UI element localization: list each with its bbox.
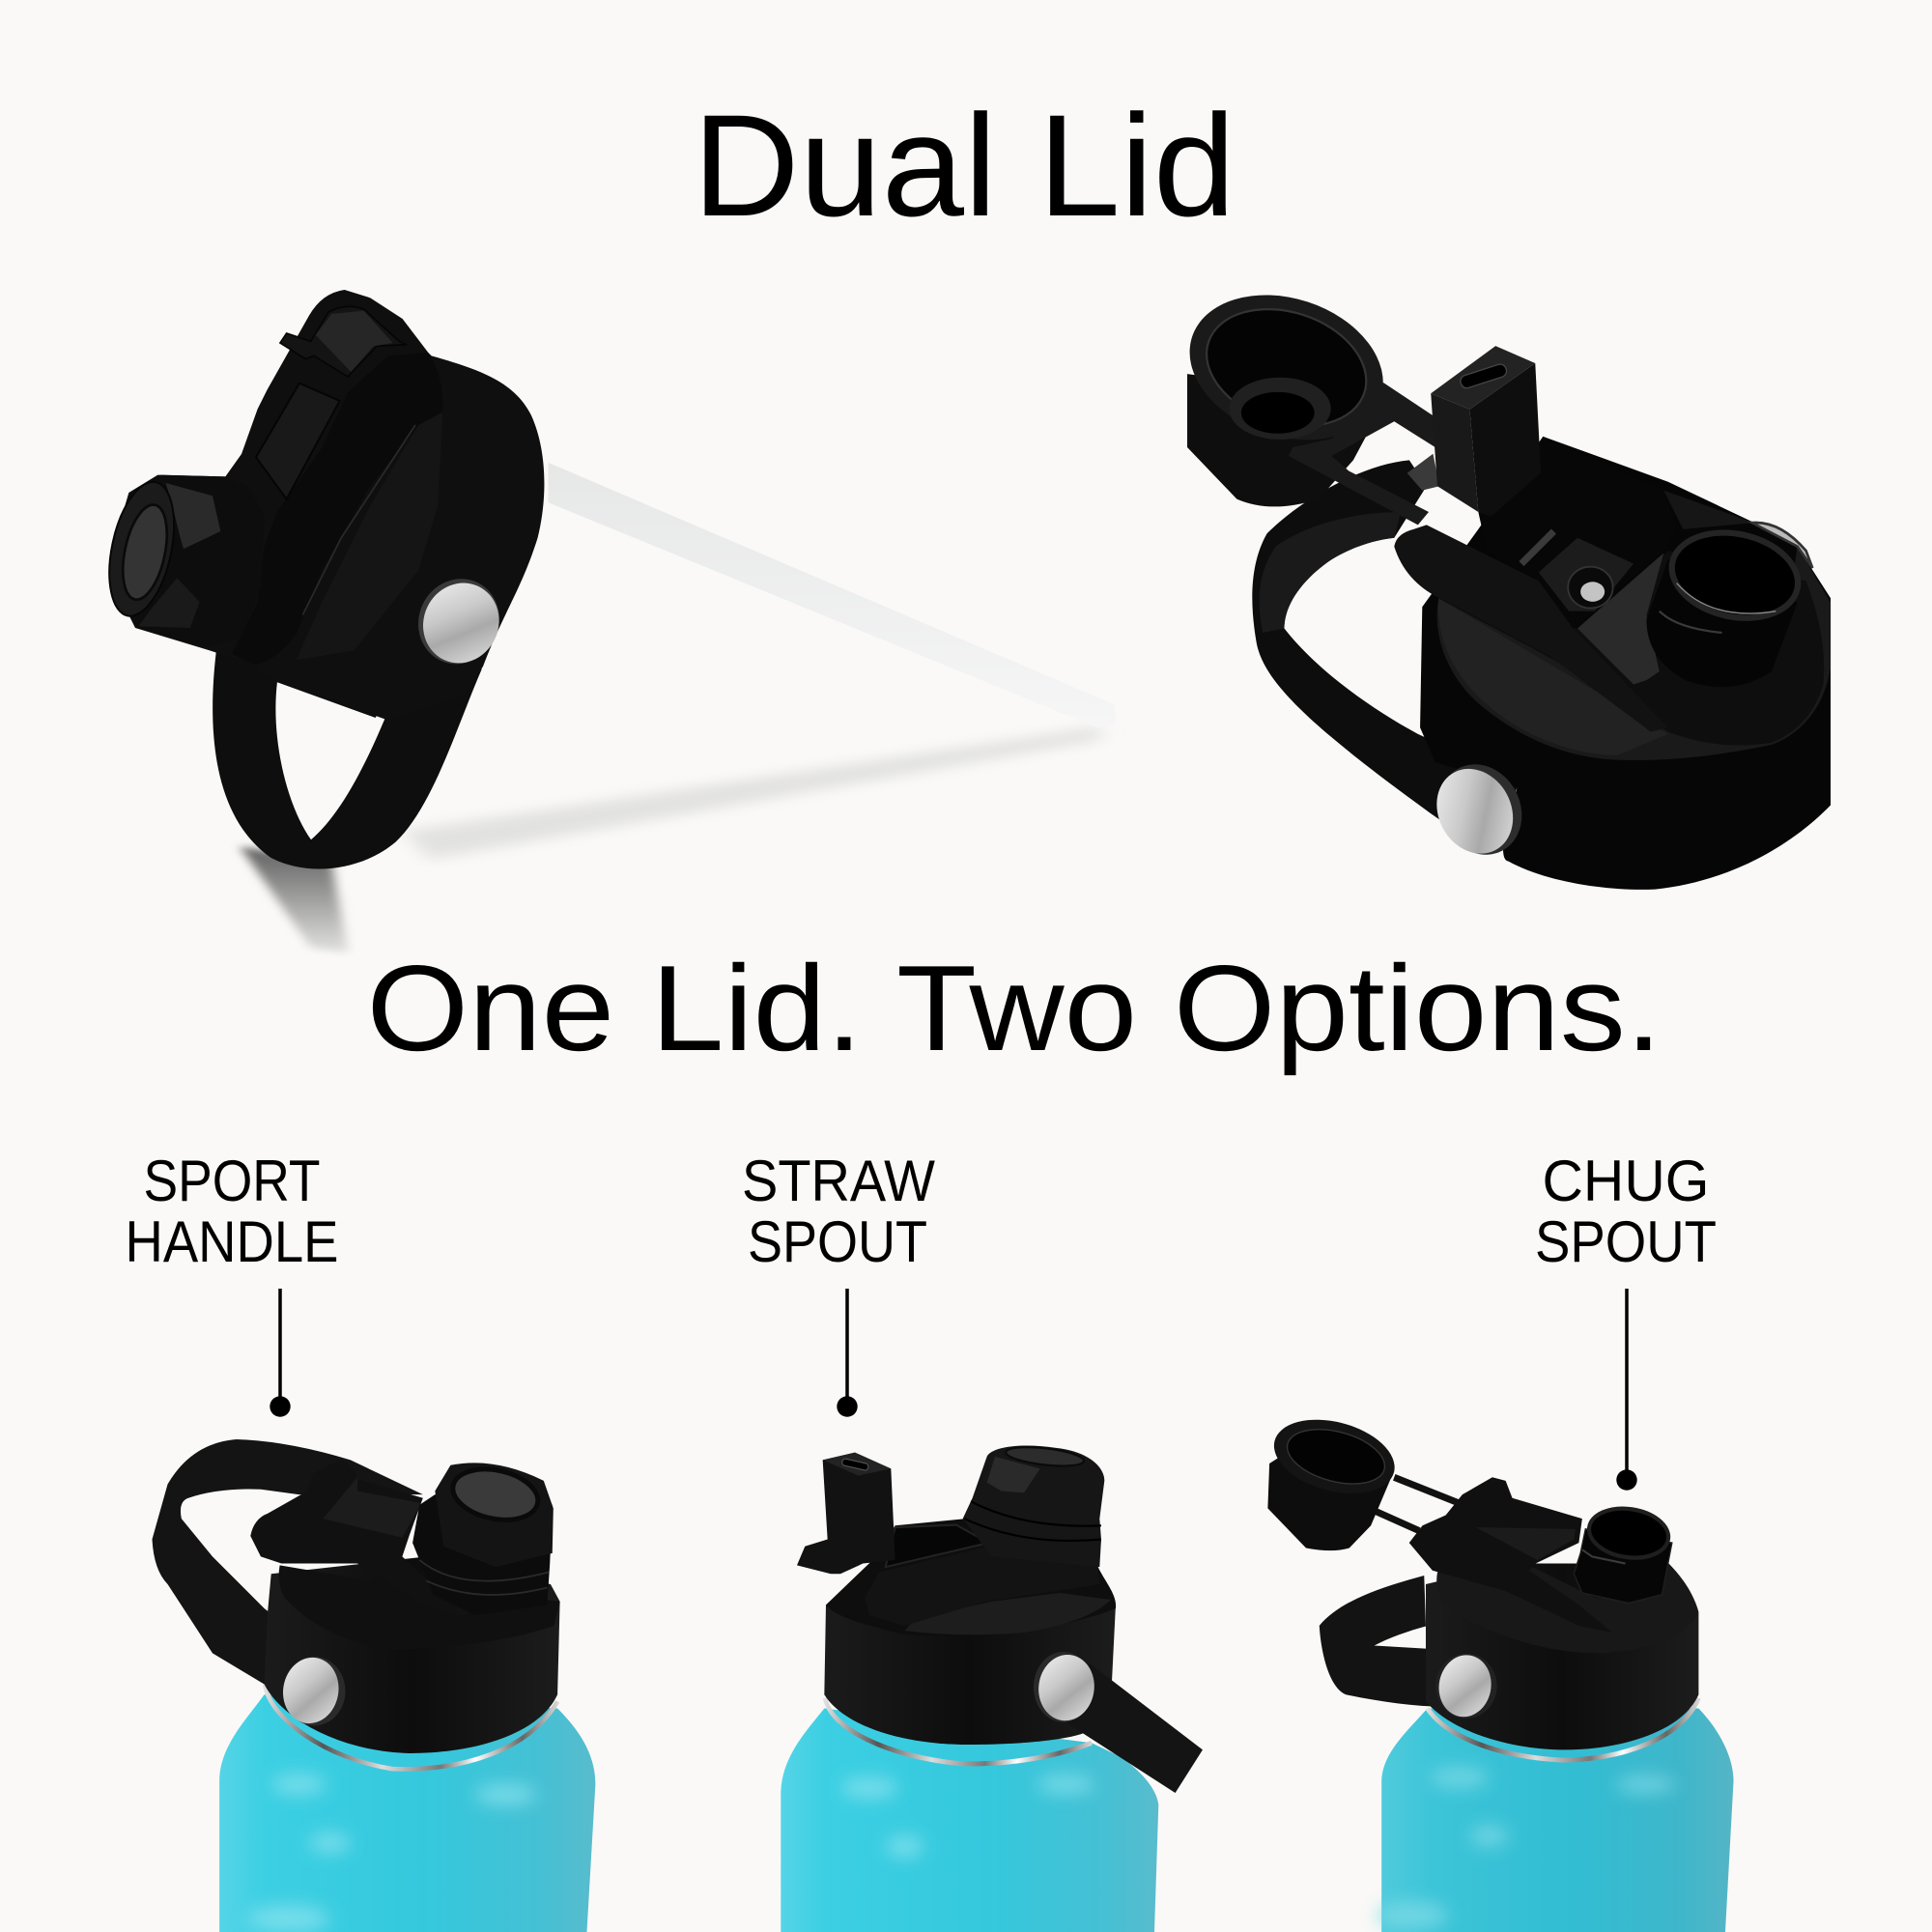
strap: [1320, 1576, 1499, 1707]
cap ring: [1171, 271, 1402, 464]
strap: [152, 1439, 423, 1694]
rivet rim: [1424, 750, 1537, 869]
spout cap: [963, 1445, 1104, 1567]
bottle: straw spout: [781, 1444, 1203, 1932]
rivet: [1422, 755, 1527, 867]
flap: [323, 1477, 421, 1538]
spout rim: [1586, 1503, 1671, 1563]
cap body: [824, 1584, 1116, 1745]
straw slot: [1459, 362, 1508, 389]
spout line 2: SPOUT: [748, 1209, 927, 1274]
pointer: chug spout: [1616, 1289, 1637, 1491]
teal body: [219, 1694, 595, 1932]
straw: [549, 463, 1116, 726]
cap top face: [1005, 1444, 1085, 1469]
left plate: [1438, 598, 1668, 755]
rivet rim: [405, 565, 513, 677]
cap top: [826, 1519, 1116, 1635]
spout platform: [1439, 551, 1824, 746]
spout body: [1574, 1529, 1672, 1604]
spout rim glint: [1677, 583, 1776, 613]
upper band: [1437, 547, 1831, 760]
steel ring: [265, 1685, 557, 1769]
rivet rim: [283, 1657, 345, 1725]
spout bands: [419, 1560, 549, 1595]
tether: [1289, 383, 1435, 525]
plate swell: [297, 412, 442, 660]
pull tab roller: [316, 311, 393, 372]
spout face: [115, 500, 175, 604]
rivet: [1033, 1649, 1100, 1726]
teal body: [781, 1709, 1158, 1932]
lid photo: open caps: [1171, 271, 1831, 890]
lid body: [1420, 437, 1831, 890]
textured wedge: [1577, 553, 1663, 685]
straw shadow: [403, 726, 1100, 860]
handle line 2: HANDLE: [126, 1209, 338, 1274]
straw tube right side: [1469, 363, 1541, 516]
pellet hole: [1568, 567, 1613, 609]
arm plate: [1394, 525, 1668, 732]
straw tube front: [1431, 393, 1478, 512]
recess bar: [1521, 531, 1553, 564]
cap body: [1187, 374, 1385, 506]
tether arms: [1346, 1477, 1459, 1531]
recess: [1478, 437, 1677, 629]
cap body: [265, 1556, 560, 1753]
straw slot: [841, 1459, 868, 1471]
knob: [435, 1463, 554, 1567]
label: chug spout: [1535, 1149, 1717, 1274]
knob grip bottom: [138, 578, 200, 628]
knob grip top: [166, 483, 220, 549]
cap notch: [987, 1457, 1040, 1492]
strap gap: [1375, 1627, 1428, 1649]
shoulder highlights: [840, 1776, 1094, 1857]
spout body: [1646, 559, 1798, 687]
strap shadow: [240, 846, 349, 952]
spout base: [412, 1494, 553, 1615]
straw top: [823, 1453, 891, 1475]
arm plate: [865, 1547, 1099, 1626]
lid body: [113, 290, 544, 720]
rivet: [411, 571, 512, 675]
cap body: [1267, 1426, 1394, 1550]
strap: [1065, 1663, 1203, 1793]
steel ring: [825, 1698, 1092, 1764]
cap top plate: [279, 1565, 560, 1650]
bottle: sport handle: [152, 1439, 595, 1932]
pellet: [1580, 582, 1605, 602]
cap inside: [1282, 1420, 1390, 1493]
recess floor: [1539, 538, 1634, 611]
rivet: [1434, 1650, 1496, 1722]
sport line 1: SPORT: [143, 1149, 321, 1213]
cap inner hole: [1241, 392, 1315, 434]
straw tube top: [1431, 346, 1535, 410]
lid photo: side view with straw: [99, 290, 1116, 952]
straw, strap and shadows: [213, 463, 1116, 952]
straw tube: [797, 1453, 895, 1574]
cap body: [1426, 1564, 1698, 1749]
strap: [1252, 460, 1518, 853]
flap: [1476, 1527, 1576, 1560]
cap ring: [1266, 1407, 1402, 1505]
teal body: [1381, 1709, 1734, 1932]
title: Dual Lid: [693, 84, 1236, 246]
pointer: straw spout: [837, 1289, 858, 1417]
spout line 2: SPOUT: [1535, 1209, 1717, 1274]
lid head: [99, 290, 544, 720]
spout rim: [1663, 522, 1805, 629]
strap: [213, 642, 482, 869]
bottle: chug spout: [1266, 1407, 1734, 1932]
rivet rim: [1034, 1652, 1093, 1722]
cap inside: [1191, 290, 1381, 445]
side rivet: [1752, 523, 1812, 568]
pull tab: [280, 306, 406, 377]
arm plate: [250, 1460, 461, 1619]
rivet rim: [1435, 1654, 1497, 1719]
rivet: [278, 1653, 344, 1728]
spout collar: [1582, 1549, 1626, 1564]
steel ring: [1428, 1698, 1698, 1760]
lid top plate: [232, 353, 442, 665]
label: sport handle: [126, 1149, 338, 1274]
chug line 1: CHUG: [1542, 1149, 1710, 1213]
spout bands: [964, 1501, 1101, 1541]
strap inner surface: [1260, 512, 1401, 633]
flap: [256, 384, 340, 499]
right rim ridge: [1663, 491, 1754, 529]
headline: One Lid. Two Options.: [367, 940, 1662, 1076]
straw line 1: STRAW: [742, 1149, 935, 1213]
spout collar: [1660, 611, 1722, 633]
cap top plate: [1436, 1564, 1698, 1653]
spout face ring: [99, 476, 185, 622]
shoulder highlights: [247, 1774, 537, 1932]
frame opening: [886, 1525, 988, 1567]
top plate: [905, 1593, 1111, 1634]
label: straw spout: [742, 1149, 935, 1274]
arm plate: [1409, 1477, 1612, 1633]
spout knob: [116, 475, 264, 647]
knob top: [448, 1462, 543, 1527]
straw base: [1407, 454, 1439, 491]
shoulder highlights: [1376, 1767, 1675, 1929]
plate groove: [302, 425, 415, 615]
pointer: sport handle: [270, 1289, 291, 1417]
cap inner step: [1229, 378, 1331, 440]
